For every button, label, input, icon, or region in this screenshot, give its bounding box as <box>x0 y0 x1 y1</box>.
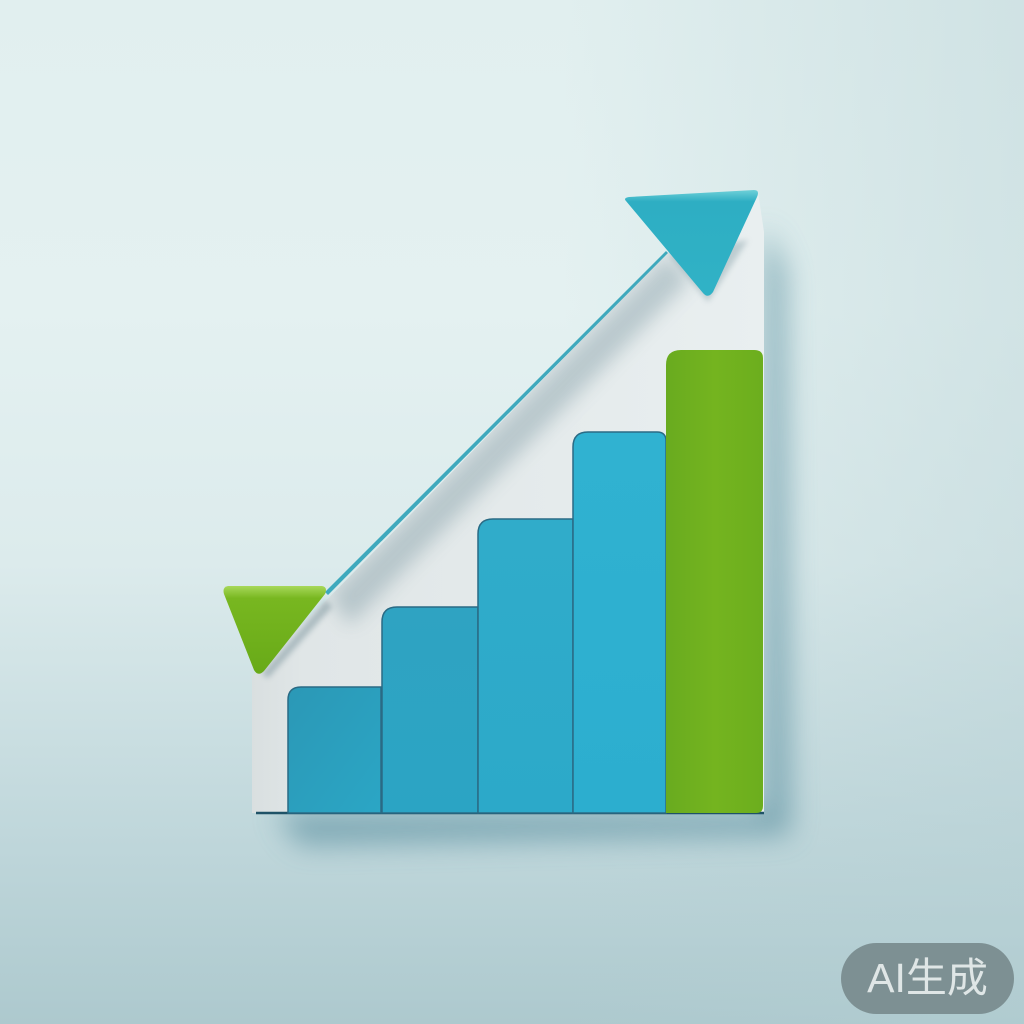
panel: stepped white backing plate <box>252 192 764 813</box>
bar chart <box>288 350 763 813</box>
arrow shaft <box>325 251 668 595</box>
badge: AI generated: AI生成 <box>867 955 988 1001</box>
bar 2 <box>382 607 478 813</box>
arrowhead shadow <box>668 240 748 302</box>
icon: green start triangle <box>224 586 326 674</box>
bar 4 <box>573 432 666 813</box>
bar 5 green <box>666 350 763 813</box>
bar 3 <box>478 519 573 813</box>
icon: teal arrowhead triangle <box>625 190 758 296</box>
badge: AI generated <box>841 943 1014 1014</box>
green triangle shadow <box>262 600 332 678</box>
panel shadow <box>275 225 790 845</box>
bar 1 <box>288 687 381 813</box>
